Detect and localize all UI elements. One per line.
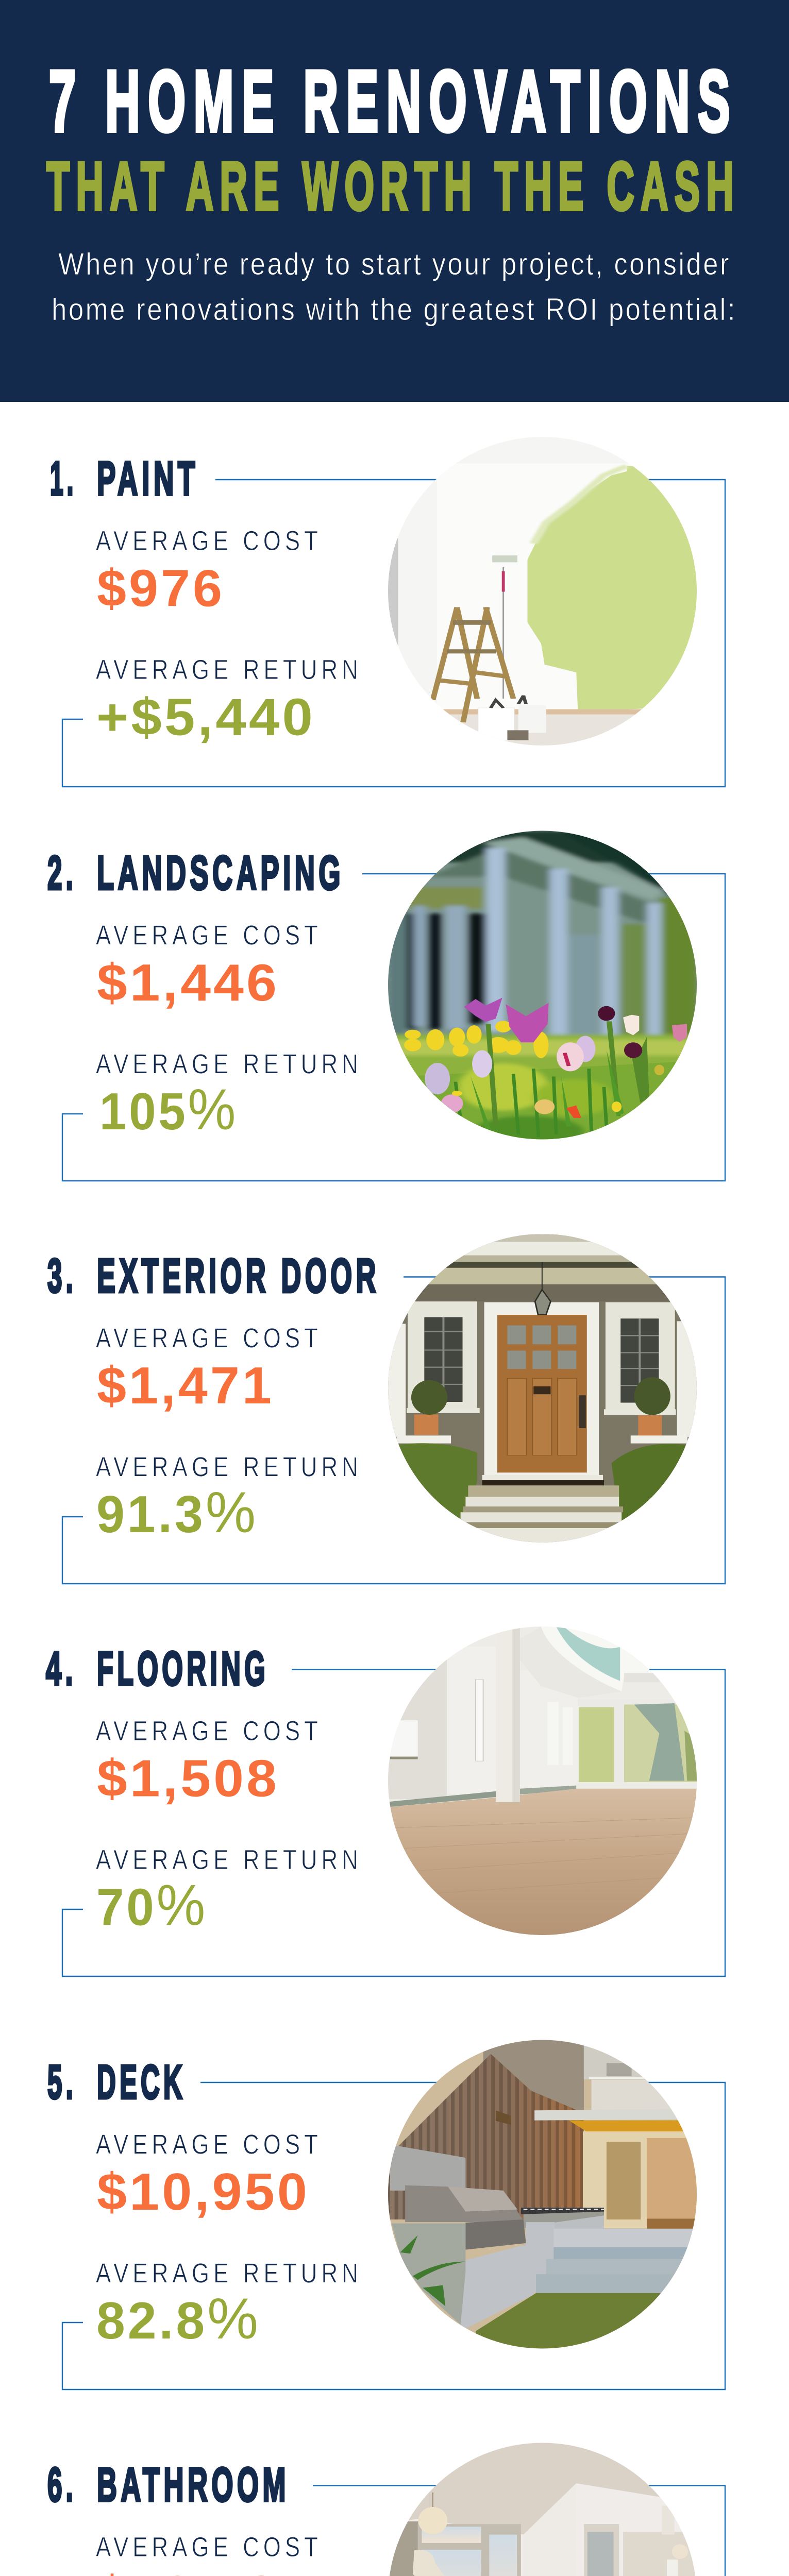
- panel: 3 exterior door: [47, 1234, 725, 1584]
- value: cost: $1,446: [97, 954, 279, 1012]
- intro text: [52, 247, 737, 327]
- panel: 2 landscaping: [47, 831, 725, 1181]
- value: cost: $1,471: [97, 1357, 274, 1415]
- photo: outdoor kitchen and deck: [388, 2040, 697, 2348]
- heading: 2. Landscaping: [47, 846, 344, 900]
- value: cost: $10,950: [97, 2163, 310, 2221]
- label: average cost: AVERAGE COST: [96, 2129, 322, 2160]
- label: average return: AVERAGE RETURN: [96, 654, 362, 685]
- photo: wooden front door on porch: [388, 1234, 697, 1543]
- photo: empty room with hardwood floor: [388, 1626, 697, 1935]
- heading: 5. Deck: [47, 2055, 186, 2109]
- value: return: +$5,440: [96, 688, 315, 746]
- panel: 1 paint: [50, 437, 725, 787]
- heading: 2. Landscaping: 2.: [47, 846, 77, 900]
- panel: 5 deck: [47, 2040, 725, 2389]
- label: average cost: AVERAGE COST: [96, 1716, 322, 1747]
- value: return: 105%: [99, 1077, 238, 1142]
- panel: 4 flooring: [46, 1626, 725, 1976]
- heading: 1. Paint: PAINT: [97, 451, 199, 505]
- label: average return: AVERAGE RETURN: [96, 2258, 362, 2289]
- heading: 1. Paint: 1.: [50, 451, 77, 505]
- heading: 6. Bathroom: 6.: [47, 2458, 77, 2511]
- heading: 3. Exterior Door: [47, 1249, 380, 1302]
- heading: 5. Deck: 5.: [47, 2055, 77, 2109]
- label: average return: AVERAGE RETURN: [96, 1049, 362, 1080]
- panel: 6 bathroom: [47, 2443, 725, 2576]
- label: average cost: AVERAGE COST: [96, 920, 322, 951]
- value: return: 70%: [96, 1873, 208, 1937]
- heading: 5. Deck: DECK: [97, 2055, 186, 2109]
- heading: 4. Flooring: [46, 1641, 269, 1695]
- heading: 4. Flooring: 4.: [46, 1641, 77, 1695]
- heading: 3. Exterior Door: EXTERIOR DOOR: [97, 1249, 380, 1302]
- label: average return: AVERAGE RETURN: [96, 1452, 362, 1483]
- header panel: [0, 0, 789, 402]
- value: return: 91.3%: [96, 1480, 258, 1545]
- label: average cost: AVERAGE COST: [96, 2532, 322, 2563]
- heading: 6. Bathroom: BATHROOM: [97, 2458, 290, 2511]
- label: average cost: AVERAGE COST: [96, 526, 322, 556]
- value: return: 82.8%: [96, 2286, 261, 2351]
- photo: bright bathroom with vanity: [388, 2443, 697, 2576]
- photo: paint roller, ladder and green wall: [388, 437, 697, 745]
- label: average cost: AVERAGE COST: [96, 1323, 322, 1354]
- label: average return: AVERAGE RETURN: [96, 1844, 362, 1875]
- heading: 3. Exterior Door: 3.: [47, 1249, 77, 1302]
- value: cost: $976: [97, 560, 225, 617]
- heading: 1. Paint: [50, 451, 199, 505]
- heading: 6. Bathroom: [47, 2458, 290, 2511]
- photo: tulips in front of a porch: [388, 831, 697, 1147]
- heading: 4. Flooring: FLOORING: [97, 1641, 269, 1695]
- value: cost: $1,508: [97, 1750, 279, 1807]
- heading: 2. Landscaping: LANDSCAPING: [97, 846, 344, 900]
